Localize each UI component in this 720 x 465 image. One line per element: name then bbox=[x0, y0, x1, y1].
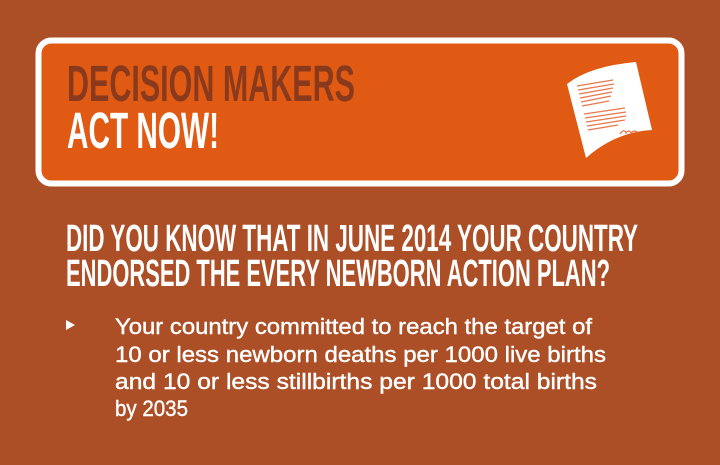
heading: act now: ACT NOW! bbox=[67, 102, 219, 159]
panel: header box bbox=[38, 40, 682, 184]
text block: commitment: 10 or less newborn deaths per 1000 live births bbox=[115, 342, 606, 367]
icon: document bbox=[567, 62, 652, 158]
bullet arrow bbox=[66, 320, 75, 330]
heading: question bbox=[66, 218, 638, 295]
text block: commitment bbox=[115, 314, 606, 421]
text block: commitment: Your country committed to reach the target of bbox=[115, 314, 593, 339]
text block: commitment: and 10 or less stillbirths per 1000 total births bbox=[115, 369, 597, 394]
text block: commitment: by 2035 bbox=[115, 396, 188, 421]
heading: decision makers: DECISION MAKERS bbox=[67, 55, 355, 112]
